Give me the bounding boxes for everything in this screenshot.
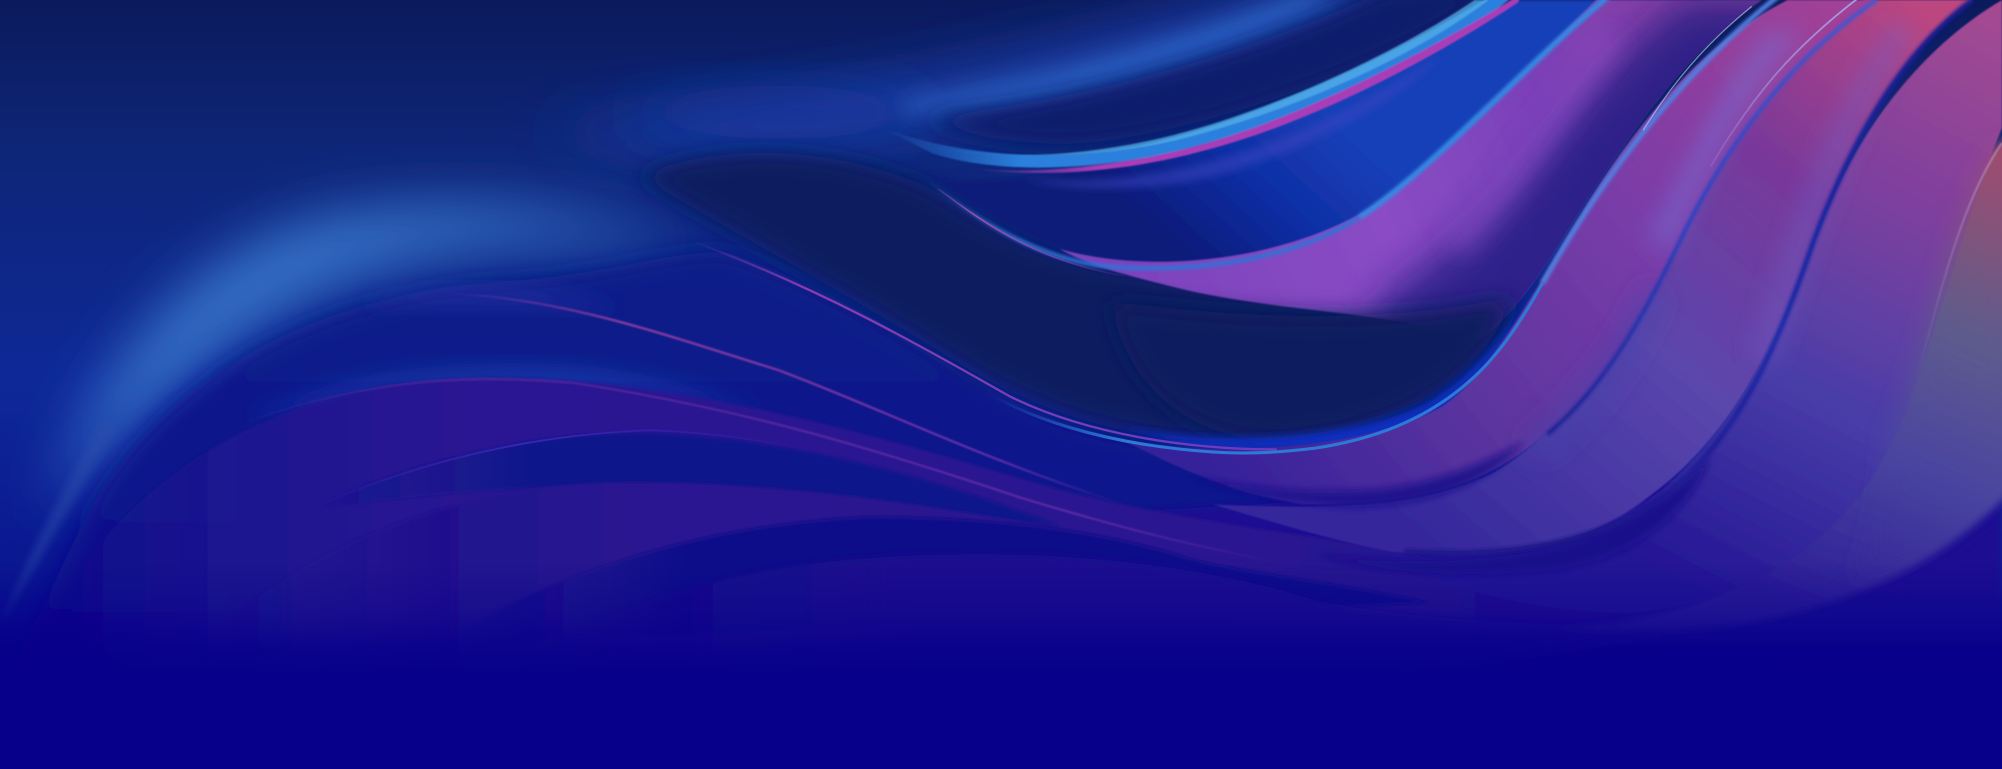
bright top ribbon bbox=[881, 0, 1522, 173]
navy blend on band 1 lower edge bbox=[1226, 291, 1518, 436]
soft shade under top ribbon bbox=[1021, 55, 1443, 188]
dark navy central region bbox=[638, 153, 1513, 441]
bottom fade overlay bbox=[0, 562, 2002, 674]
inner pocket crest bbox=[350, 430, 776, 494]
blue glow above first ridge bbox=[282, 362, 720, 408]
band 5 light edge bbox=[1915, 143, 2002, 383]
band 5 overlay blend bbox=[1901, 136, 2002, 418]
bottom solid band bbox=[0, 673, 2002, 769]
pale line on band 2 edge bbox=[1643, 6, 1752, 130]
blue ripple above band 2 bbox=[1124, 287, 1539, 451]
left band edge highlight on band 1 bbox=[930, 183, 1360, 268]
thin ribbon highlights bbox=[230, 0, 2002, 562]
band 2 purple bbox=[1124, 0, 1877, 504]
main ribbon line 1 bbox=[696, 243, 1277, 449]
dark pocket below band 2 bbox=[1187, 440, 1526, 507]
base fill under right side bbox=[1158, 478, 2002, 617]
purple-blue glow on second crest bbox=[411, 286, 558, 306]
light blue arc glow left bbox=[51, 206, 689, 511]
pink trim on band 1 edge bbox=[938, 189, 1124, 276]
band 4 purple bbox=[1422, 0, 2002, 612]
deep navy band under arc bbox=[50, 252, 1217, 614]
faint light beam lower left bbox=[10, 454, 96, 603]
blue halo left of ribbon bbox=[662, 72, 839, 124]
dark pocket top ribbon bbox=[925, 0, 1419, 144]
band 1 blue edge bbox=[1360, 0, 1611, 217]
second magenta ribbon bbox=[447, 294, 1124, 504]
pale blue swoosh top bbox=[894, 0, 1353, 115]
groove lines between bands bbox=[1404, 0, 1973, 553]
band 3 light edge bbox=[1711, 0, 1864, 166]
main ribbon blue line bbox=[983, 283, 1542, 453]
soft blue glow top centre bbox=[536, 0, 1468, 149]
lower left wave ridge 1 bbox=[145, 376, 1404, 630]
band 5 mauve right edge bbox=[1621, 134, 2002, 629]
ridge 1 crest bbox=[261, 378, 1236, 554]
blue panel between ribbon and band 1 bbox=[932, 0, 1602, 266]
band 1 shadow fold bbox=[1379, 0, 1788, 370]
band 2 blue edge upper bbox=[1542, 0, 1781, 283]
dark pocket lower centre bbox=[520, 516, 1424, 625]
sheen on bands bbox=[1443, 26, 1915, 462]
dark pocket below band 3 bbox=[1315, 457, 1711, 574]
band 1 purple bbox=[1060, 0, 1762, 338]
band 3 purple bbox=[1213, 0, 1973, 555]
inner dark pocket lower left bbox=[306, 433, 1060, 526]
lower left wave ridge 2 bbox=[414, 481, 1026, 610]
lower wave ridge 3 bbox=[696, 554, 1322, 621]
